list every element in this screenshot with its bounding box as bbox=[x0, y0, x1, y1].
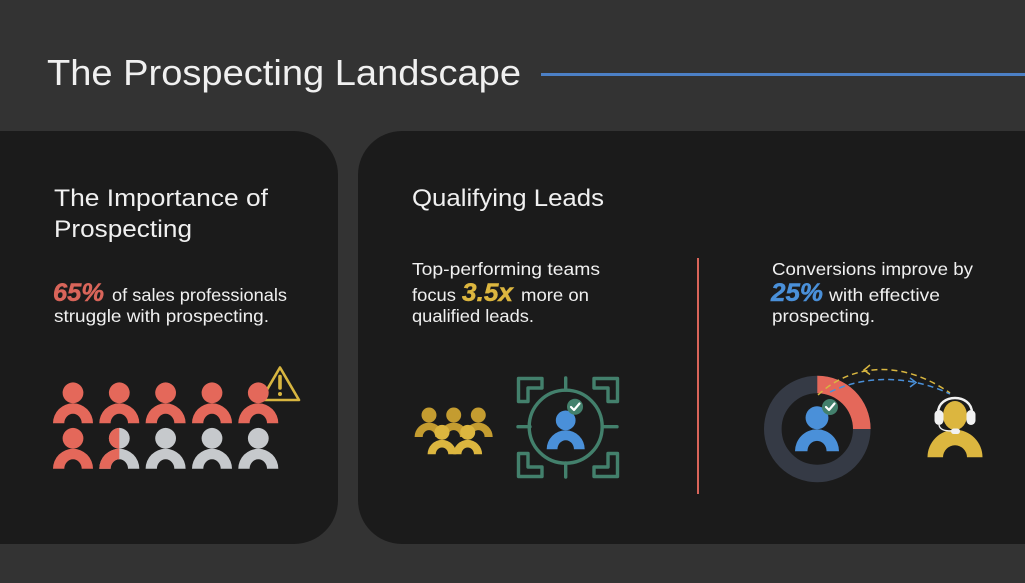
text: 25 percent statistic: prospecting. bbox=[772, 306, 875, 326]
text: 65 percent statistic: struggle with prospecting. bbox=[54, 306, 269, 326]
text: 3.5x statistic: qualified leads. bbox=[412, 306, 534, 326]
text: 65 percent statistic: of sales professionals bbox=[112, 285, 287, 305]
text: 3.5x statistic: more on bbox=[521, 285, 589, 305]
icon: headset agent bbox=[928, 398, 982, 457]
divider bbox=[697, 258, 699, 494]
heading: importance: The Importance of bbox=[54, 185, 268, 212]
icon: gold team group bbox=[415, 408, 493, 454]
text: 25 percent statistic: with effective bbox=[828, 285, 940, 305]
icon: target on qualified lead bbox=[518, 378, 618, 477]
text: 3.5x statistic: focus bbox=[412, 285, 456, 305]
panel: the importance of prospecting bbox=[0, 131, 338, 544]
panel: qualifying leads bbox=[358, 131, 1025, 544]
people grid: 65 percent of ten bbox=[53, 382, 278, 469]
text: 3.5x statistic: Top-performing teams bbox=[412, 259, 600, 279]
text: 25 percent statistic: Conversions improve by bbox=[772, 259, 973, 279]
arrow: blue dashed arc bbox=[830, 378, 950, 394]
icon: warning triangle bbox=[261, 368, 299, 400]
title: The Prospecting Landscape bbox=[47, 52, 521, 93]
text: 3.5x statistic bbox=[412, 259, 600, 326]
text: 25 percent statistic bbox=[770, 259, 973, 326]
heading: qualifying leads: Qualifying Leads bbox=[412, 185, 604, 212]
text: 25 percent statistic: 25% bbox=[770, 279, 823, 307]
text: 65 percent statistic: 65% bbox=[53, 279, 104, 307]
text: 65 percent statistic bbox=[53, 279, 287, 326]
title rule bbox=[541, 73, 1025, 76]
chart: donut 25 percent bbox=[773, 376, 871, 474]
arrow: yellow dashed arc bbox=[818, 365, 950, 395]
heading: importance bbox=[54, 185, 268, 243]
text: 3.5x statistic: 3.5x bbox=[462, 279, 514, 307]
heading: importance: Prospecting bbox=[54, 216, 192, 243]
